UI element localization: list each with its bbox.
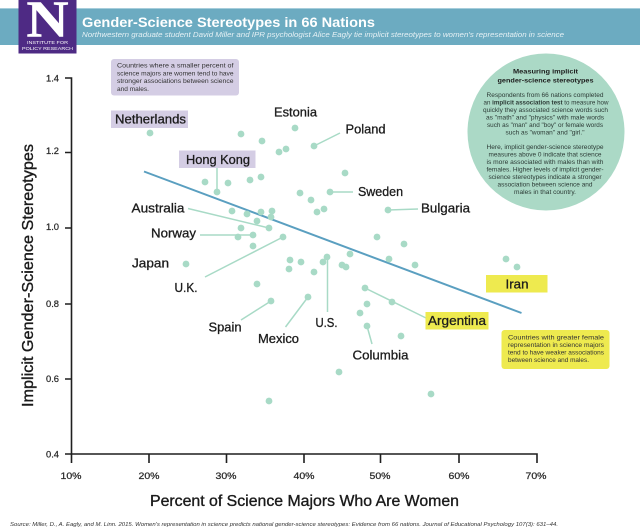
info circle: measuring implicit stereotypes: females. Higher levels of implicit gender-	[486, 166, 604, 174]
label: Iran: Iran	[506, 276, 528, 292]
y axis tick labels	[46, 74, 59, 460]
info circle: measuring implicit stereotypes: an implicit association test to measure how	[484, 100, 609, 106]
x axis tick labels: 40%	[294, 471, 315, 482]
label: Mexico: Mexico	[258, 331, 299, 346]
y axis tick labels: 0.4	[46, 450, 59, 460]
label: Iran	[486, 275, 548, 292]
y axis tick labels: 0.6	[46, 374, 59, 385]
info circle: measuring implicit stereotypes: quickly they associated science words such	[483, 107, 608, 114]
info circle: measuring implicit stereotypes: Respondents from 66 nations completed	[486, 92, 604, 99]
logo: Institute for Policy Research	[18, 0, 76, 54]
title: Gender-Science Stereotypes in 66 Nations	[82, 14, 375, 30]
logo: Institute for Policy Research: POLICY RESEARCH	[22, 46, 73, 51]
info circle: measuring implicit stereotypes: Measuring implicit	[513, 68, 579, 76]
source note: Source: Miller, D., A. Eagly, and M. Linn. 2015. Women's representation in science predicts national gender-science stereotypes: Evidence from 66 nations. Journal of Educational Psychology 107(3): 631–44.	[10, 522, 558, 528]
header banner	[0, 8, 640, 45]
label: Spain: Spain	[208, 320, 242, 334]
label: Japan: Japan	[132, 256, 169, 270]
x axis tick labels: 30%	[216, 471, 237, 482]
info circle: measuring implicit stereotypes: gender-science stereotypes	[498, 78, 594, 85]
info circle: measuring implicit stereotypes: is more associated with males than with	[486, 159, 604, 166]
x axis tick labels	[60, 471, 547, 482]
label: Bulgaria: Bulgaria	[421, 200, 471, 216]
label: Sweden: Sweden	[358, 184, 403, 199]
info circle: measuring implicit stereotypes: science stereotypes indicate a stronger	[488, 174, 602, 181]
subtitle: Northwestern graduate student David Miller and IPR psychologist Alice Eagly tie implicit stereotypes to women's representation in science	[82, 30, 564, 39]
info circle: measuring implicit stereotypes: males in that country.	[514, 189, 576, 196]
callout: smaller percent of women: and males.	[117, 86, 149, 93]
info circle: measuring implicit stereotypes: association between science and	[498, 182, 593, 188]
trend line	[144, 172, 522, 313]
y axis title: Implicit Gender-Science Stereotypes	[20, 144, 37, 407]
scatter points	[147, 125, 520, 404]
info circle: measuring implicit stereotypes: Here, implicit gender-science stereotype	[486, 144, 604, 151]
label: Hong Kong: Hong Kong	[186, 152, 250, 167]
x axis tick labels: 10%	[60, 471, 82, 482]
callout: greater female representation: representation in science majors	[508, 342, 605, 349]
callout: greater female representation: tend to have weaker associations	[508, 350, 605, 357]
info circle: measuring implicit stereotypes: measures above 0 indicate that science	[488, 152, 602, 158]
label: Poland: Poland	[346, 122, 386, 136]
callout: smaller percent of women: stronger associations between science	[117, 78, 234, 85]
info circle: measuring implicit stereotypes: such as "man" and "boy" or female words	[487, 122, 603, 129]
callout: greater female representation	[502, 330, 610, 369]
x axis tick labels: 50%	[370, 471, 391, 482]
callout: greater female representation: Countries with greater female	[508, 335, 604, 342]
callout: smaller percent of women	[111, 59, 239, 96]
label: Norway: Norway	[151, 226, 196, 240]
label: Netherlands: Netherlands	[115, 112, 186, 126]
x axis tick labels: 70%	[526, 471, 547, 482]
logo: Institute for Policy Research: INSTITUTE FOR	[27, 40, 68, 45]
callout: smaller percent of women: Countries where a smaller percent of	[117, 62, 234, 69]
x axis tick labels: 60%	[448, 471, 470, 482]
y axis tick labels: 0.8	[46, 299, 59, 310]
label: U.K.: U.K.	[174, 280, 198, 295]
x axis tick labels: 20%	[138, 471, 160, 482]
leader lines	[188, 133, 426, 344]
chart axes	[65, 78, 537, 463]
x axis title: Percent of Science Majors Who Are Women	[150, 493, 459, 510]
y axis tick labels: 1.4	[46, 74, 59, 84]
info circle: measuring implicit stereotypes: as "math" and "physics" with male words	[486, 114, 604, 122]
callout: greater female representation: between science and males.	[508, 357, 589, 364]
label: Australia: Australia	[132, 200, 185, 216]
callout: smaller percent of women: science majors are women tend to have	[117, 70, 234, 77]
info circle: measuring implicit stereotypes: such as "woman" and "girl."	[506, 130, 584, 136]
label: Argentina: Argentina	[428, 313, 487, 328]
y axis tick labels: 1.0	[46, 222, 59, 233]
info circle: measuring implicit stereotypes	[468, 54, 624, 210]
label: Estonia: Estonia	[274, 104, 318, 120]
y axis tick labels: 1.2	[46, 146, 59, 157]
label: Columbia: Columbia	[352, 348, 409, 362]
label: U.S.: U.S.	[316, 315, 338, 330]
